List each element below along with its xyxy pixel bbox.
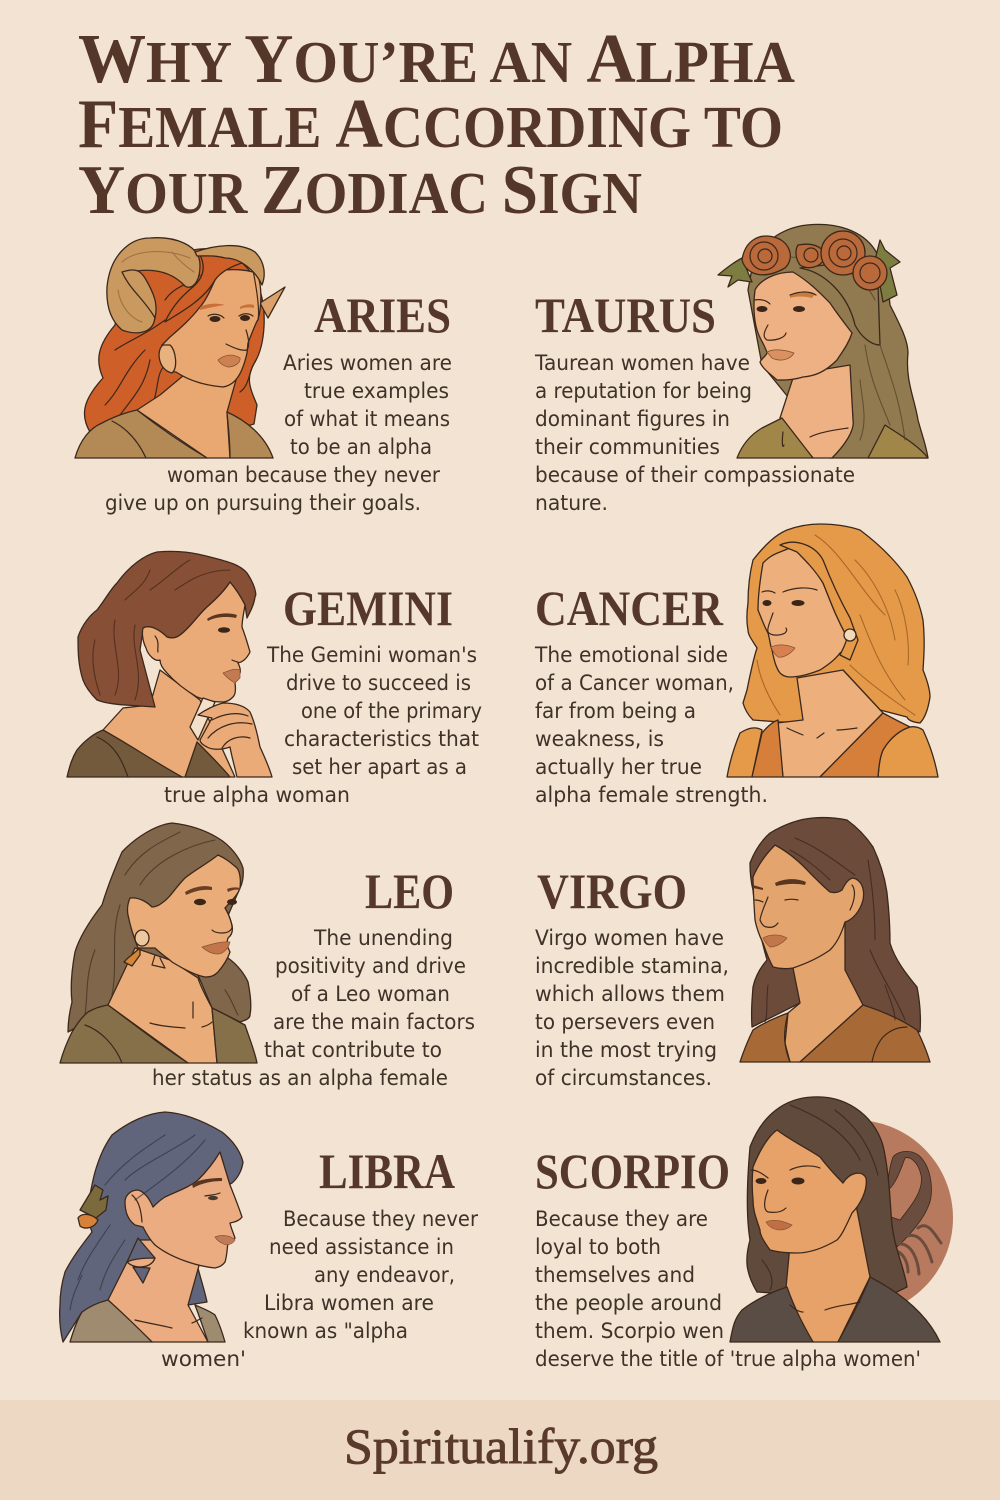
text: Aries description: to be an alpha: [290, 435, 432, 459]
text: Scorpio description: the people around: [535, 1291, 722, 1315]
text: Virgo description: of circumstances.: [535, 1066, 712, 1090]
text: Taurus description: because of their compassionate: [535, 463, 855, 487]
text: Leo description: of a Leo woman: [291, 982, 450, 1006]
portrait: Cancer woman with wavy orange hair: [727, 524, 938, 777]
text: Aries description: of what it means: [284, 407, 450, 431]
text: Scorpio description: deserve the title of 'true alpha women': [535, 1347, 921, 1371]
sign name: Gemini: GEMINI: [283, 580, 453, 636]
text: Gemini description: The Gemini woman's: [266, 643, 477, 667]
text: Scorpio description: [535, 1207, 921, 1371]
text: Leo description: are the main factors: [273, 1010, 475, 1034]
text: Taurus description: nature.: [535, 491, 608, 515]
title: YOUR ZODIAC SIGN: [78, 152, 642, 229]
text: Gemini description: characteristics that: [284, 727, 479, 751]
text: Taurus description: Taurean women have: [534, 351, 750, 375]
text: Aries description: give up on pursuing their goals.: [105, 491, 421, 515]
text: Libra description: Libra women are: [264, 1291, 434, 1315]
text: Leo description: The unending: [313, 926, 453, 950]
portrait: Leo woman with earrings: [60, 823, 257, 1063]
sign name: Libra: LIBRA: [319, 1143, 455, 1199]
background circle with scorpion: [757, 1120, 953, 1316]
text: Cancer description: of a Cancer woman,: [535, 671, 734, 695]
title: [78, 21, 795, 229]
text: Taurus description: [534, 351, 855, 515]
text: Libra description: any endeavor,: [314, 1263, 455, 1287]
text: Scorpio description: them. Scorpio wen: [535, 1319, 724, 1343]
title: WHY YOU’RE AN ALPHA: [78, 21, 795, 98]
text: Leo description: [152, 926, 475, 1090]
text: Gemini description: [164, 643, 482, 807]
portrait: Gemini woman in profile with hand at chin: [67, 551, 272, 777]
sign name: Leo: LEO: [365, 863, 454, 919]
text: Libra description: [161, 1207, 478, 1371]
text: Leo description: her status as an alpha female: [152, 1066, 448, 1090]
text: Scorpio description: themselves and: [535, 1263, 695, 1287]
portrait: Virgo woman with closed eyes: [740, 818, 930, 1062]
portrait: Scorpio woman with scorpion circle: [730, 1097, 953, 1342]
portrait: Taurus woman with rose crown: [718, 224, 928, 458]
text: Aries description: woman because they never: [167, 463, 440, 487]
text: Scorpio description: Because they are: [535, 1207, 708, 1231]
text: Libra description: need assistance in: [269, 1235, 454, 1259]
panel: Taurus: [534, 224, 928, 515]
panel: Libra: [60, 1112, 478, 1371]
text: Scorpio description: loyal to both: [535, 1235, 661, 1259]
text: Virgo description: Virgo women have: [535, 926, 724, 950]
text: Virgo description: which allows them: [535, 982, 725, 1006]
text: Leo description: positivity and drive: [275, 954, 466, 978]
text: Virgo description: incredible stamina,: [535, 954, 729, 978]
text: Gemini description: true alpha woman: [164, 783, 350, 807]
sign name: Taurus: TAURUS: [535, 287, 716, 343]
text: Cancer description: actually her true: [535, 755, 702, 779]
text: Cancer description: alpha female strength.: [535, 783, 768, 807]
sign name: Aries: ARIES: [314, 287, 451, 343]
text: Aries description: true examples: [304, 379, 449, 403]
panel: Cancer: [534, 524, 938, 807]
text: Leo description: that contribute to: [264, 1038, 442, 1062]
text: Virgo description: in the most trying: [535, 1038, 717, 1062]
sign name: Scorpio: SCORPIO: [535, 1143, 730, 1199]
footer: website name: Spiritualify.org: [344, 1418, 658, 1474]
text: Virgo description: to persevers even: [535, 1010, 715, 1034]
text: Cancer description: [534, 643, 768, 807]
panel: Leo: [60, 823, 475, 1090]
panel: Virgo: [535, 818, 930, 1090]
portrait: Libra woman with blue-grey hair: [60, 1112, 243, 1342]
footer band: [0, 1400, 1000, 1500]
text: Cancer description: The emotional side: [534, 643, 728, 667]
text: Taurus description: dominant figures in: [535, 407, 730, 431]
text: Libra description: Because they never: [283, 1207, 478, 1231]
text: Aries description: Aries women are: [283, 351, 452, 375]
title: FEMALE ACCORDING TO: [78, 86, 783, 163]
text: Taurus description: their communities: [535, 435, 720, 459]
panel: Gemini: [67, 551, 482, 807]
portrait: Aries woman with ram horns: [75, 238, 285, 458]
sign name: Cancer: CANCER: [535, 580, 724, 636]
text: Cancer description: weakness, is: [535, 727, 664, 751]
text: Aries description: [105, 351, 452, 515]
text: Cancer description: far from being a: [535, 699, 696, 723]
text: Taurus description: a reputation for being: [535, 379, 752, 403]
text: Gemini description: set her apart as a: [292, 755, 467, 779]
sign name: Virgo: VIRGO: [537, 863, 687, 919]
text: Gemini description: drive to succeed is: [286, 671, 471, 695]
panel: Scorpio: [535, 1097, 953, 1371]
panel: Aries: [75, 238, 452, 515]
text: Libra description: women': [161, 1347, 246, 1371]
text: Virgo description: [535, 926, 729, 1090]
text: Libra description: known as "alpha: [243, 1319, 408, 1343]
text: Gemini description: one of the primary: [301, 699, 482, 723]
